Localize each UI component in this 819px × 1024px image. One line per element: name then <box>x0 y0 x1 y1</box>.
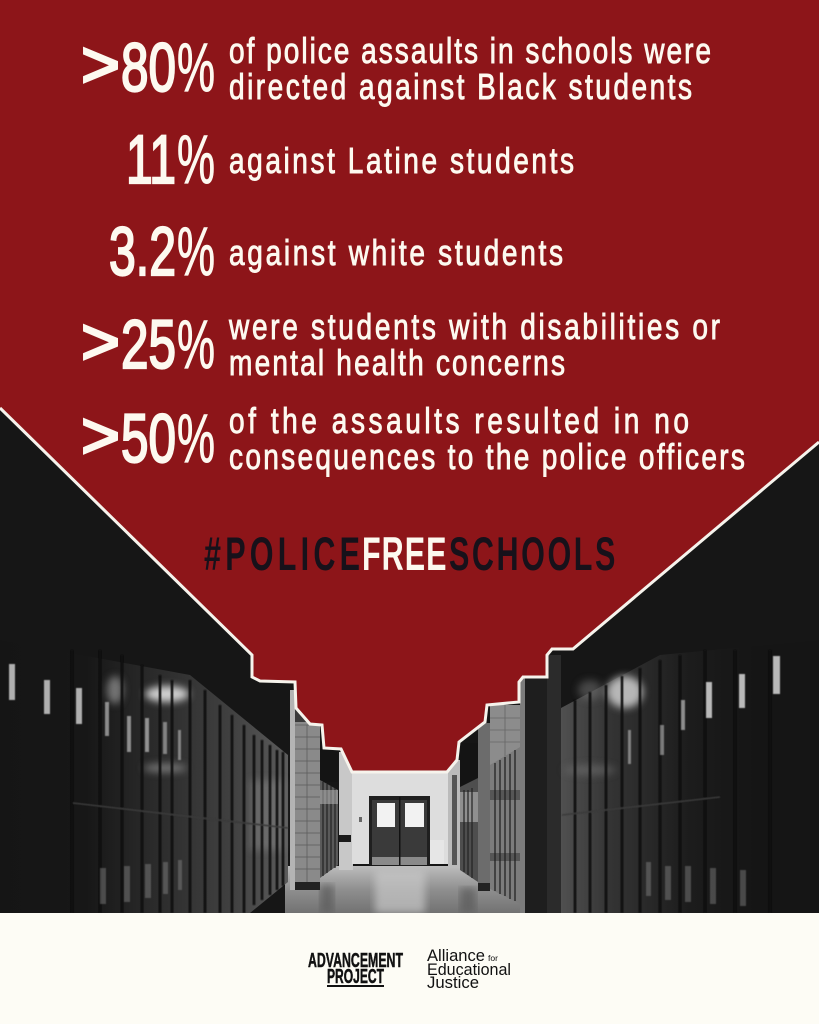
right tile pillar <box>478 723 490 891</box>
door <box>369 796 430 865</box>
left lockers <box>0 640 288 913</box>
stat: 3.2% <box>109 213 563 290</box>
right lockers mid <box>490 655 561 913</box>
stat: over 80%: > <box>81 27 120 101</box>
stat: over 25%: were students with disabilities or <box>228 307 720 347</box>
stat: over 80%: % <box>177 29 215 106</box>
stat: over 80%: directed against Black students <box>229 67 692 107</box>
stat: 11%: % <box>177 121 215 198</box>
trash bin <box>430 840 444 864</box>
white outline <box>0 408 819 772</box>
stat: over 80%: of police assaults in schools were <box>229 31 711 71</box>
end wall <box>352 770 449 864</box>
right lockers <box>561 640 819 913</box>
wall sign and bench <box>339 817 362 842</box>
hashtag: SCHOOLS <box>449 528 615 581</box>
stat: over 25%: mental health concerns <box>229 343 565 383</box>
stat: over 80% <box>81 27 711 107</box>
left distant lockers <box>320 748 338 878</box>
stat: over 50%: of the assaults resulted in no <box>229 401 689 441</box>
stat: over 50%: % <box>177 400 215 477</box>
locker handles <box>100 860 746 906</box>
right distant lockers <box>460 743 478 882</box>
stat: over 25%: 25 <box>121 306 176 383</box>
hashtag: FREE <box>362 528 447 581</box>
stat: over 25% <box>81 304 720 383</box>
stat: over 25%: % <box>177 306 215 383</box>
stat: 11% <box>126 121 574 198</box>
locker dividers <box>72 650 770 913</box>
stat: over 50%: consequences to the police officers <box>229 437 745 477</box>
left tile pillar <box>290 690 320 890</box>
stat: over 25%: > <box>81 304 120 378</box>
logo: Advancement Project <box>308 950 403 988</box>
logo: Advancement Project: PROJECT <box>327 966 384 988</box>
stat: over 80%: 80 <box>121 29 176 106</box>
logo: Advancement Project: ADVANCEMENT <box>308 950 403 972</box>
logo: Alliance for Educational Justice: Justice <box>427 973 479 992</box>
hallway photo <box>0 400 819 913</box>
stat: 11%: against Latine students <box>229 141 574 181</box>
logo: Alliance for Educational Justice: for <box>488 954 498 963</box>
stat: 3.2%: 3.2 <box>109 213 176 290</box>
stat: over 50%: > <box>81 398 120 472</box>
stat: over 50%: 50 <box>121 400 176 477</box>
logo: Alliance for Educational Justice: Educational <box>427 960 511 979</box>
logo: Alliance for Educational Justice: Alliance <box>427 946 485 965</box>
side wall right <box>448 760 460 868</box>
locker vents <box>9 656 780 764</box>
stat: 3.2%: against white students <box>229 233 563 273</box>
logo: Alliance for Educational Justice <box>427 946 511 992</box>
stat: over 50% <box>81 398 745 477</box>
locker highlights <box>107 676 643 850</box>
footer band <box>0 913 819 1024</box>
stat: 3.2%: % <box>177 213 215 290</box>
hashtag <box>204 528 615 581</box>
floor <box>285 866 535 913</box>
red chevron panel <box>0 0 819 772</box>
side wall left <box>339 752 353 870</box>
stat: 11%: 11 <box>126 121 176 198</box>
hashtag: #POLICE <box>204 528 360 581</box>
